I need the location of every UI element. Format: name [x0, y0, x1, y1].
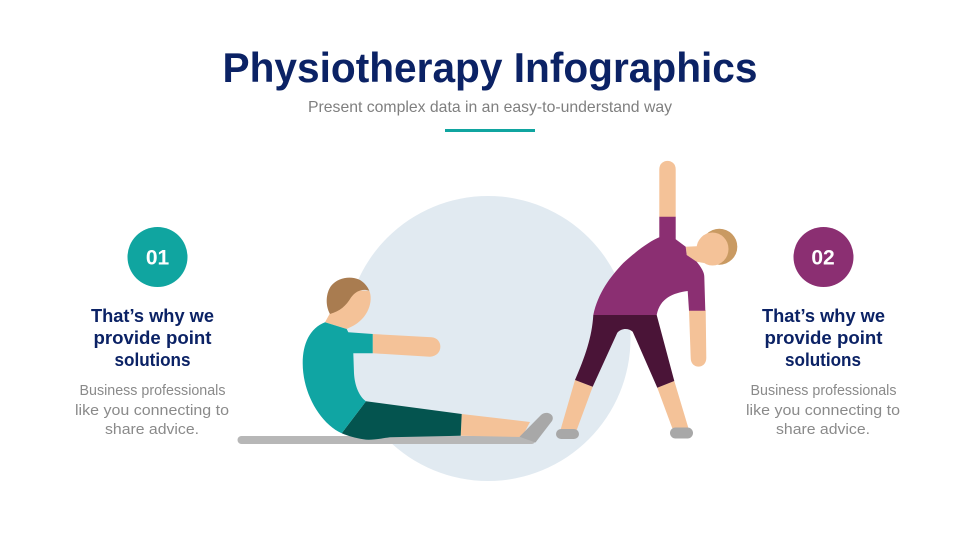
title: Physiotherapy Infographics	[222, 44, 758, 91]
heading 02: solutions	[785, 350, 861, 370]
left leg	[561, 380, 593, 430]
badge 02: 02	[811, 246, 835, 270]
face	[696, 232, 728, 266]
heading 01: That’s why we	[91, 306, 214, 326]
shorts	[575, 315, 674, 388]
exercise mat	[238, 436, 536, 444]
shirt	[593, 217, 705, 315]
body text 02: like you connecting to	[746, 402, 900, 419]
body text 02: share advice.	[776, 421, 870, 438]
raised arm	[659, 161, 676, 217]
body text 01: like you connecting to	[75, 402, 229, 419]
title underline	[445, 129, 535, 132]
foot	[520, 413, 553, 442]
badge 01: 01	[146, 246, 169, 270]
badge 02	[794, 227, 854, 287]
panel: point 01	[75, 227, 229, 438]
shorts	[342, 401, 462, 440]
shirt	[303, 322, 373, 433]
background circle	[346, 196, 630, 481]
lowered arm	[689, 310, 706, 367]
neck	[686, 246, 704, 263]
body text 01: share advice.	[105, 421, 199, 438]
right shoe	[670, 428, 693, 438]
left shoe	[556, 429, 579, 439]
heading 02: provide point	[764, 328, 882, 348]
illustration: sitting person	[238, 278, 553, 444]
arm	[373, 334, 440, 357]
body text 02: Business professionals	[750, 382, 896, 399]
panel: point 02	[746, 227, 900, 438]
heading 01: solutions	[114, 350, 190, 370]
illustration: standing person side stretch	[556, 161, 737, 439]
body text 01: Business professionals	[80, 382, 226, 399]
right leg	[657, 381, 688, 428]
heading 01: provide point	[94, 328, 212, 348]
subtitle: Present complex data in an easy-to-understand way	[308, 99, 672, 116]
face and neck	[325, 290, 371, 329]
hair	[327, 278, 369, 314]
heading 02: That’s why we	[762, 306, 885, 326]
leg	[461, 414, 530, 437]
hair	[701, 229, 737, 265]
badge 01	[128, 227, 188, 287]
